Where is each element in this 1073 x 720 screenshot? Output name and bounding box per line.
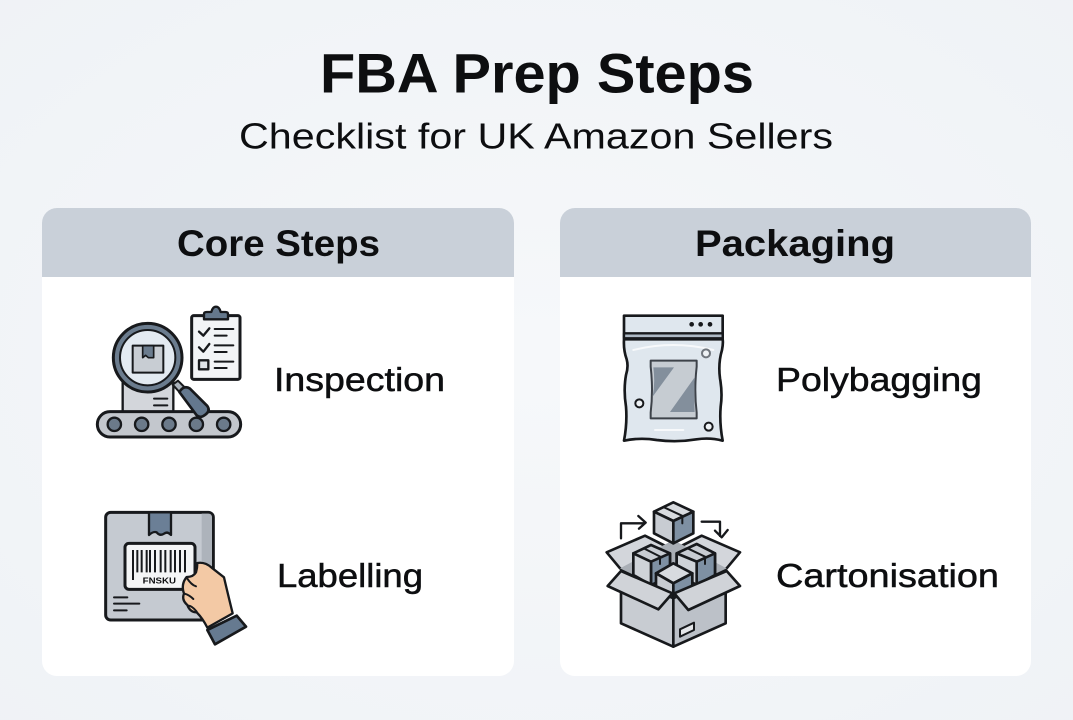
title: FBA Prep Steps <box>320 42 754 104</box>
label: labelling: Labelling <box>277 557 423 594</box>
heading: packaging: Packaging <box>695 223 895 264</box>
icon: inspection <box>97 307 241 437</box>
panel: core steps <box>42 208 514 676</box>
subtitle: Checklist for UK Amazon Sellers <box>239 116 833 156</box>
label: inspection: Inspection <box>274 361 445 398</box>
icon: polybag <box>624 316 723 441</box>
heading: core steps: Core Steps <box>177 223 380 264</box>
panel: packaging <box>560 208 1031 676</box>
icon: carton <box>607 502 740 647</box>
label: polybagging: Polybagging <box>776 361 982 398</box>
icon: labelling <box>106 512 246 644</box>
icon: labelling: FNSKU <box>143 575 176 585</box>
label: cartonisation: Cartonisation <box>776 557 999 594</box>
